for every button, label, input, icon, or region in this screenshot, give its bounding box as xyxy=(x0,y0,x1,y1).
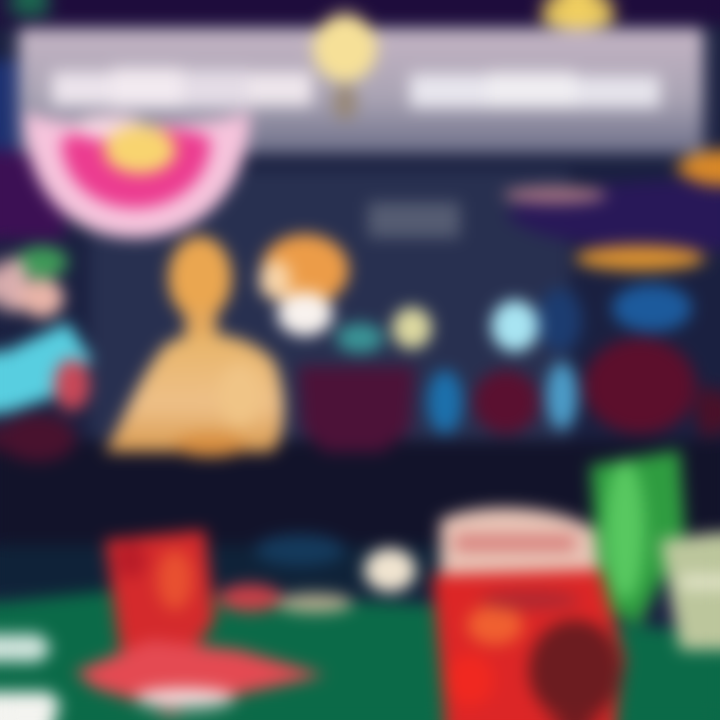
illustration: green chip stack xyxy=(590,450,685,625)
icon: pink fan decoration xyxy=(24,112,250,238)
illustration: golden figure xyxy=(105,236,284,457)
illustration: cream items on table xyxy=(277,548,416,613)
illustration: bearded figure xyxy=(259,234,349,336)
text block: blurred sign xyxy=(368,202,460,238)
illustration: red chip stack right xyxy=(432,508,625,720)
illustration: red chip stack left xyxy=(75,530,325,712)
illustration: maroon chairs xyxy=(298,338,720,452)
green felt table xyxy=(0,590,720,720)
illustration: left player xyxy=(0,246,92,462)
illustration: pale chip stack right xyxy=(660,532,720,650)
illustration: white bottom-left cards xyxy=(0,634,62,720)
panel: title banner xyxy=(18,28,704,154)
illustration: background lights and players xyxy=(336,284,692,434)
icon: ceiling lights xyxy=(8,0,616,120)
illustration: striped awning at right xyxy=(503,150,720,271)
blurred banner lettering xyxy=(52,68,660,108)
